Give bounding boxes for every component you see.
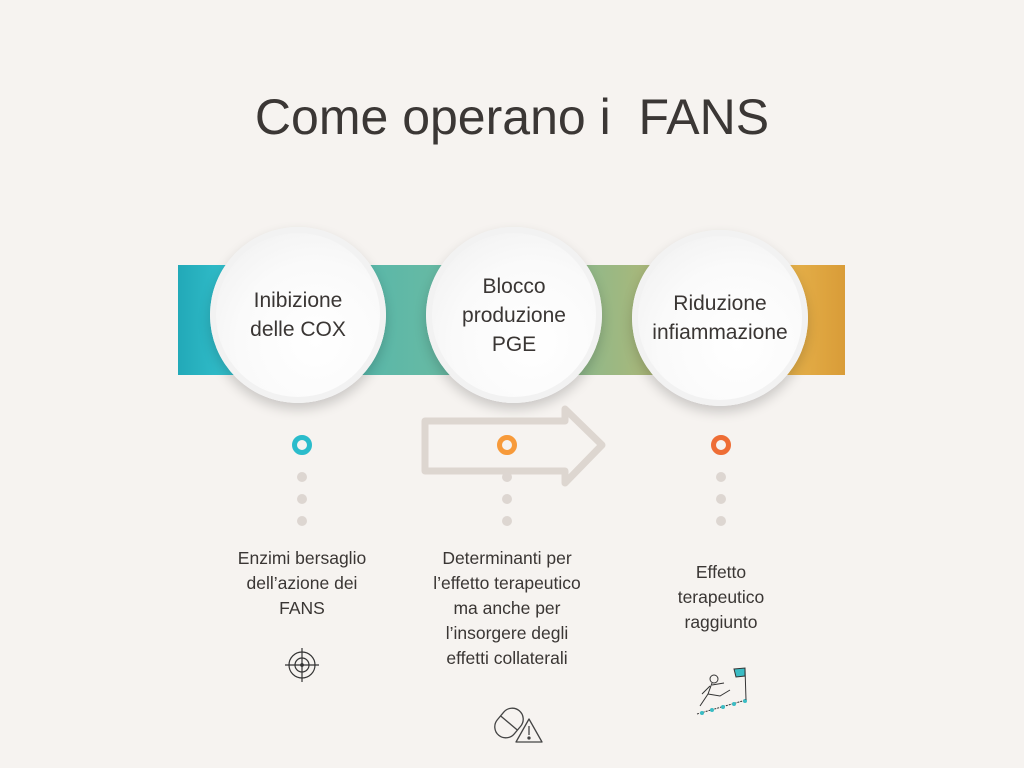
circle 1: delle COX [250, 318, 346, 341]
band [178, 265, 845, 375]
text 1: FANS [279, 598, 325, 618]
text 2: ma anche per [453, 598, 560, 618]
marker 1 [292, 435, 312, 526]
text 3: terapeutico [678, 587, 764, 607]
text 3: Effetto [696, 562, 746, 582]
circle 2: produzione [462, 304, 566, 326]
circle 3: infiammazione [652, 321, 788, 344]
circle 3 [632, 230, 808, 406]
text 2: Determinanti per [442, 548, 572, 568]
circle 3: Riduzione [673, 292, 767, 315]
marker 3 [711, 435, 731, 526]
icon: target [285, 648, 319, 682]
circle 2: PGE [492, 332, 536, 356]
text 2: l’insorgere degli [446, 623, 568, 643]
arrow [422, 406, 606, 486]
icon: pills warning [494, 708, 543, 743]
circle 1: Inibizione [254, 289, 342, 312]
circle 2: Blocco [482, 274, 546, 298]
text 2: l’effetto terapeutico [433, 573, 581, 593]
text 3: raggiunto [684, 612, 757, 632]
text 1: dell’azione dei [247, 573, 357, 593]
icon: runner with flag [696, 668, 747, 715]
text 2 [433, 548, 581, 668]
circle 1 [210, 227, 386, 403]
text 1: Enzimi bersaglio [238, 548, 366, 568]
marker 2 [497, 435, 517, 526]
text 3 [678, 562, 764, 632]
text 1 [238, 548, 366, 618]
circle 2 [426, 227, 602, 403]
text 2: effetti collaterali [446, 648, 568, 668]
title: Come operano i FANS [255, 89, 769, 145]
